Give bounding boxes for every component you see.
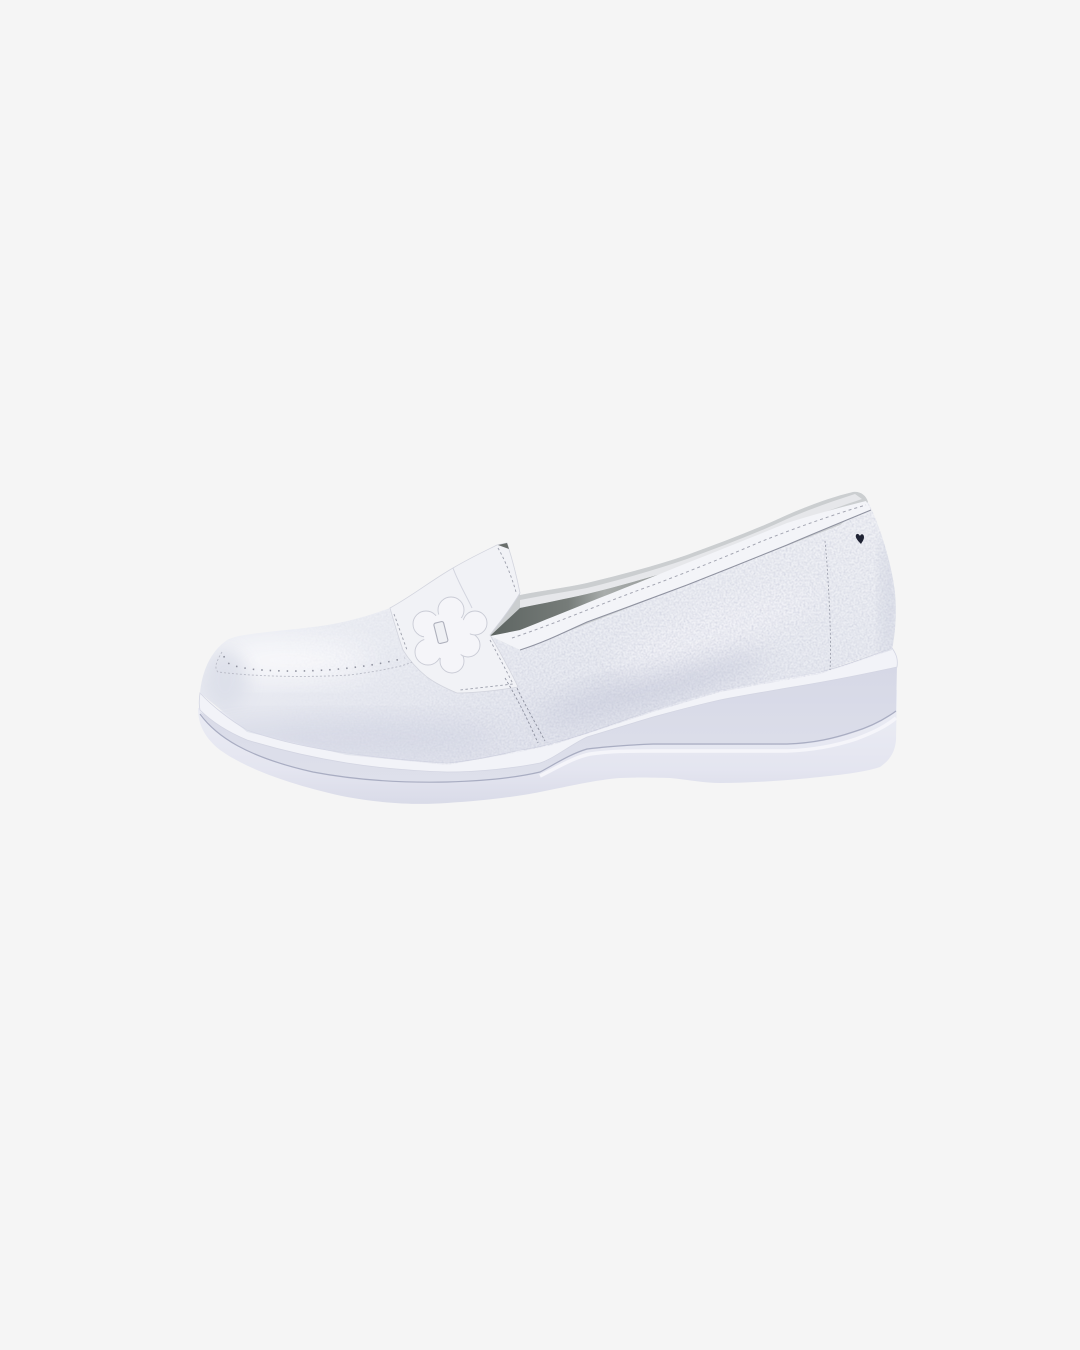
- product image panel: [198, 492, 898, 804]
- strap stitching: [394, 548, 516, 690]
- opening and insole: [490, 492, 868, 650]
- icon: heart rivet: [856, 534, 864, 544]
- shoe: [190, 480, 910, 804]
- tab tip shadow: [498, 543, 509, 549]
- sole groove highlight: [540, 718, 896, 776]
- upper shading and texture: [208, 504, 896, 764]
- seam from strap to sole: [505, 678, 545, 743]
- sole groove shadow: [200, 711, 896, 782]
- insole interior: [490, 527, 787, 636]
- saddle strap: [390, 543, 520, 693]
- upper leather: [200, 492, 896, 763]
- far rim inner lighter strip: [520, 494, 862, 608]
- apron stitching on toe: [216, 652, 412, 676]
- wedge midsole wall: [200, 665, 897, 783]
- far collar rim: [490, 492, 868, 650]
- flower ornament: [413, 597, 487, 673]
- collar band: [490, 501, 871, 650]
- flower centre buckle: [433, 621, 448, 644]
- welt rim: [199, 648, 897, 772]
- heel seam: [825, 541, 831, 670]
- outsole bottom layer: [198, 690, 897, 804]
